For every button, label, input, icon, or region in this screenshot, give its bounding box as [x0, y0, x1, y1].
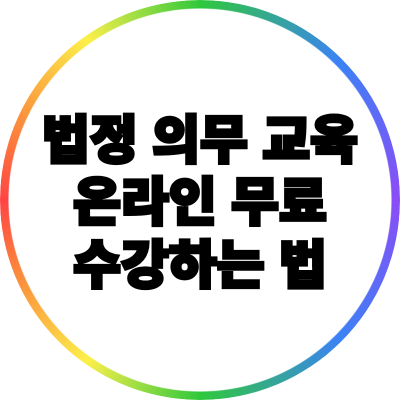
title line 3: 수강하는 법: [73, 238, 327, 296]
title line 2: 온라인 무료: [73, 174, 327, 232]
title line 1: 법정 의무 교육: [42, 112, 358, 170]
